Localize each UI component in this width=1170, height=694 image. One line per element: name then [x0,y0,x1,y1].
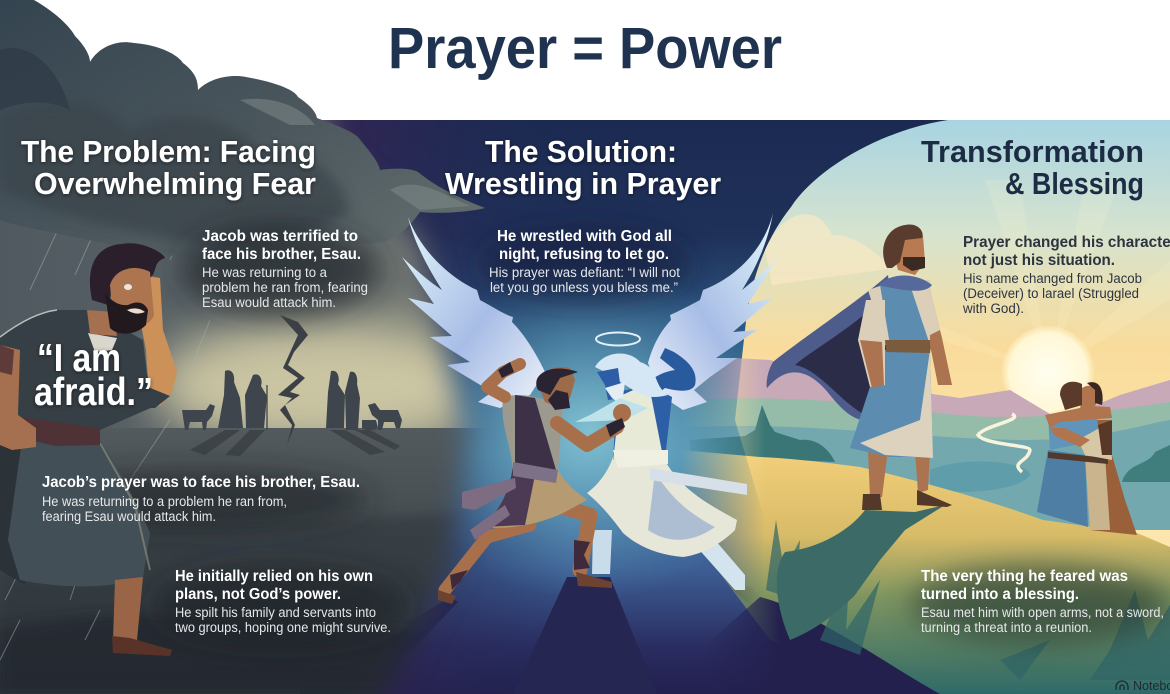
back leg [592,530,612,574]
silhouettes: family and servants [182,370,402,456]
belt [1048,452,1108,464]
panel: left problem background [0,120,520,694]
figures: wings of the angel [402,213,778,410]
right wing [648,213,778,410]
halo [596,332,640,346]
text: fear turned to blessing: turned into a blessing. [921,586,1079,603]
beard [903,257,925,271]
head [890,229,925,275]
cord [100,443,150,570]
belt [613,450,668,468]
blue sash [880,285,930,345]
arm left [858,300,885,387]
Esau head [1080,386,1097,410]
text: own plans: plans, not God’s power. [175,586,341,603]
ground [0,428,520,694]
shoulder rim light [0,310,57,337]
eye [124,284,132,290]
dark foreground slope [700,597,940,694]
leg straps [574,540,590,570]
scarf [878,276,932,291]
grassy hill [680,450,1170,694]
legs [868,450,930,497]
text: character changed: His name changed from Jacob [963,271,1142,286]
figure: transformed Israel [767,224,952,510]
sun [1002,326,1094,418]
beard [548,390,570,410]
heading: the problem: The Problem: Facing [21,134,316,169]
arms [1045,406,1112,428]
text: wrestled with God: He wrestled with God all [497,228,672,245]
figure: angel [575,348,747,590]
torso [868,280,935,345]
valley [694,398,1170,440]
robe [850,350,933,457]
dark cloak behind [0,445,25,585]
text: character changed [962,234,1170,316]
hair [883,224,923,268]
text: terrified of Esau: face his brother, Esau. [202,246,361,263]
Esau robe [1090,420,1137,535]
robe skirt [587,457,737,557]
beard [605,382,625,405]
text: wrestled with God: night, refusing to let go. [499,246,669,263]
text: wrestled with God [489,228,680,295]
heading: the solution: Wrestling in Prayer [445,166,721,201]
quote: I am afraid: afraid.” [34,371,153,414]
left arm reaching [575,398,648,422]
text: character changed: (Deceiver) to larael (Struggled [963,286,1139,301]
text: own plans [175,568,391,635]
sash [462,478,516,540]
dark drape [515,395,556,470]
sandal [576,572,612,588]
text: fear turned to blessing [921,568,1164,635]
fist [613,404,631,422]
figure: fearful Jacob [0,243,177,656]
text: Jacob's prayer: He was returning to a problem he ran from, [42,494,287,509]
left arm [0,345,36,450]
text: fear turned to blessing: turning a threat into a reunion. [921,620,1092,635]
figure: wrestling Jacob [438,362,631,604]
torso [613,385,672,460]
staff [266,385,268,430]
hair [595,354,668,397]
text: terrified of Esau: Jacob was terrified to [202,228,358,245]
text: wrestled with God: let you go unless you bless me.” [490,280,678,295]
goat left [182,404,215,430]
text: Jacob's prayer: fearing Esau would attack him. [42,509,216,524]
heading: the problem [21,134,316,201]
robe fold [648,472,715,540]
horizon light [150,320,490,450]
face [110,268,154,327]
wrist band [498,362,514,378]
heading: the problem: Overwhelming Fear [34,166,316,201]
rain [0,225,210,660]
belt [885,340,932,353]
head [90,243,165,334]
beard [105,293,148,334]
belt [513,462,558,483]
forward arm [557,423,617,445]
text: own plans: He spilt his family and servants into [175,605,376,620]
collar white [88,333,117,352]
text: Jacob's prayer [42,474,360,524]
person right 2 [345,372,360,430]
heading: the solution [445,134,721,201]
heading: transformation: & Blessing [1005,166,1144,201]
foreground grass blades [766,520,1170,680]
text: character changed: with God). [962,301,1024,316]
belt [20,417,100,446]
heading: the solution: The Solution: [485,134,677,169]
sandals [862,490,952,510]
ground shadows [190,430,400,456]
sash tail [650,468,747,495]
Esau torso [1078,422,1112,460]
quote: I am afraid [34,337,153,414]
valley and hill group [680,358,1170,694]
tunic skirt [8,440,150,586]
cloak [767,275,895,420]
text: terrified of Esau: He was returning to a [202,265,328,280]
text: own plans: He initially relied on his own [175,568,373,585]
text: fear turned to blessing: The very thing he feared was [921,568,1128,585]
hair [536,368,578,395]
sheep small [362,420,378,430]
mouth [127,308,145,314]
hair [90,243,165,305]
figure: embrace of Jacob and Esau [1037,382,1137,535]
Jacob robe [1037,450,1088,527]
sleeve [0,345,14,375]
river [978,414,1030,472]
text shadow glows [30,224,1170,645]
distant purple hills [694,358,1170,418]
arm right [930,290,952,385]
sandal [112,636,172,656]
man's shadow [777,505,945,640]
skirt [483,465,587,528]
lightning crack [278,315,308,445]
head [538,367,575,408]
text: Jacob's prayer: Jacob’s prayer was to face his brother, Esau. [42,474,360,491]
quote: I am afraid: “I am [37,337,121,380]
raised arm [640,348,696,400]
trees [690,405,835,462]
person right 1 [326,371,345,428]
panel: center solution background [300,120,1000,694]
back leg [113,577,143,640]
torso [502,395,563,470]
title: Prayer = Power [388,16,782,81]
torso [0,310,153,430]
right bush [1122,445,1170,482]
face [597,368,622,400]
watermark [1116,679,1170,693]
sleeve at elbow [140,385,170,408]
woman left [218,370,243,428]
Jacob torso [1048,405,1100,450]
front leg [695,540,745,590]
distant clouds [765,214,895,285]
raised arm [140,275,177,406]
left wing [402,217,545,408]
raised arm [487,364,520,397]
Jacob head [1060,382,1082,410]
front leg [555,505,590,570]
heading: transformation: Transformation [921,134,1144,169]
sun rays [870,180,1170,372]
storm cloud [0,0,485,276]
sandal [438,590,456,604]
lake [930,462,1030,492]
text: wrestled with God: His prayer was defiant: “I will not [489,265,680,280]
neck [87,310,117,336]
text: terrified of Esau: problem he ran from, fearing [202,280,368,295]
man with staff [245,374,267,428]
text: character changed: not just his situation. [963,252,1115,269]
text: terrified of Esau [202,228,368,310]
shin straps [450,570,468,590]
heading: transformation [921,134,1144,201]
cow right [368,403,402,430]
wrist band [606,418,625,437]
back leg [445,525,530,590]
text: terrified of Esau: Esau would attack him. [202,295,336,310]
text: own plans: two groups, hoping one might survive. [175,620,391,635]
panel: right transformation background [680,120,1170,694]
